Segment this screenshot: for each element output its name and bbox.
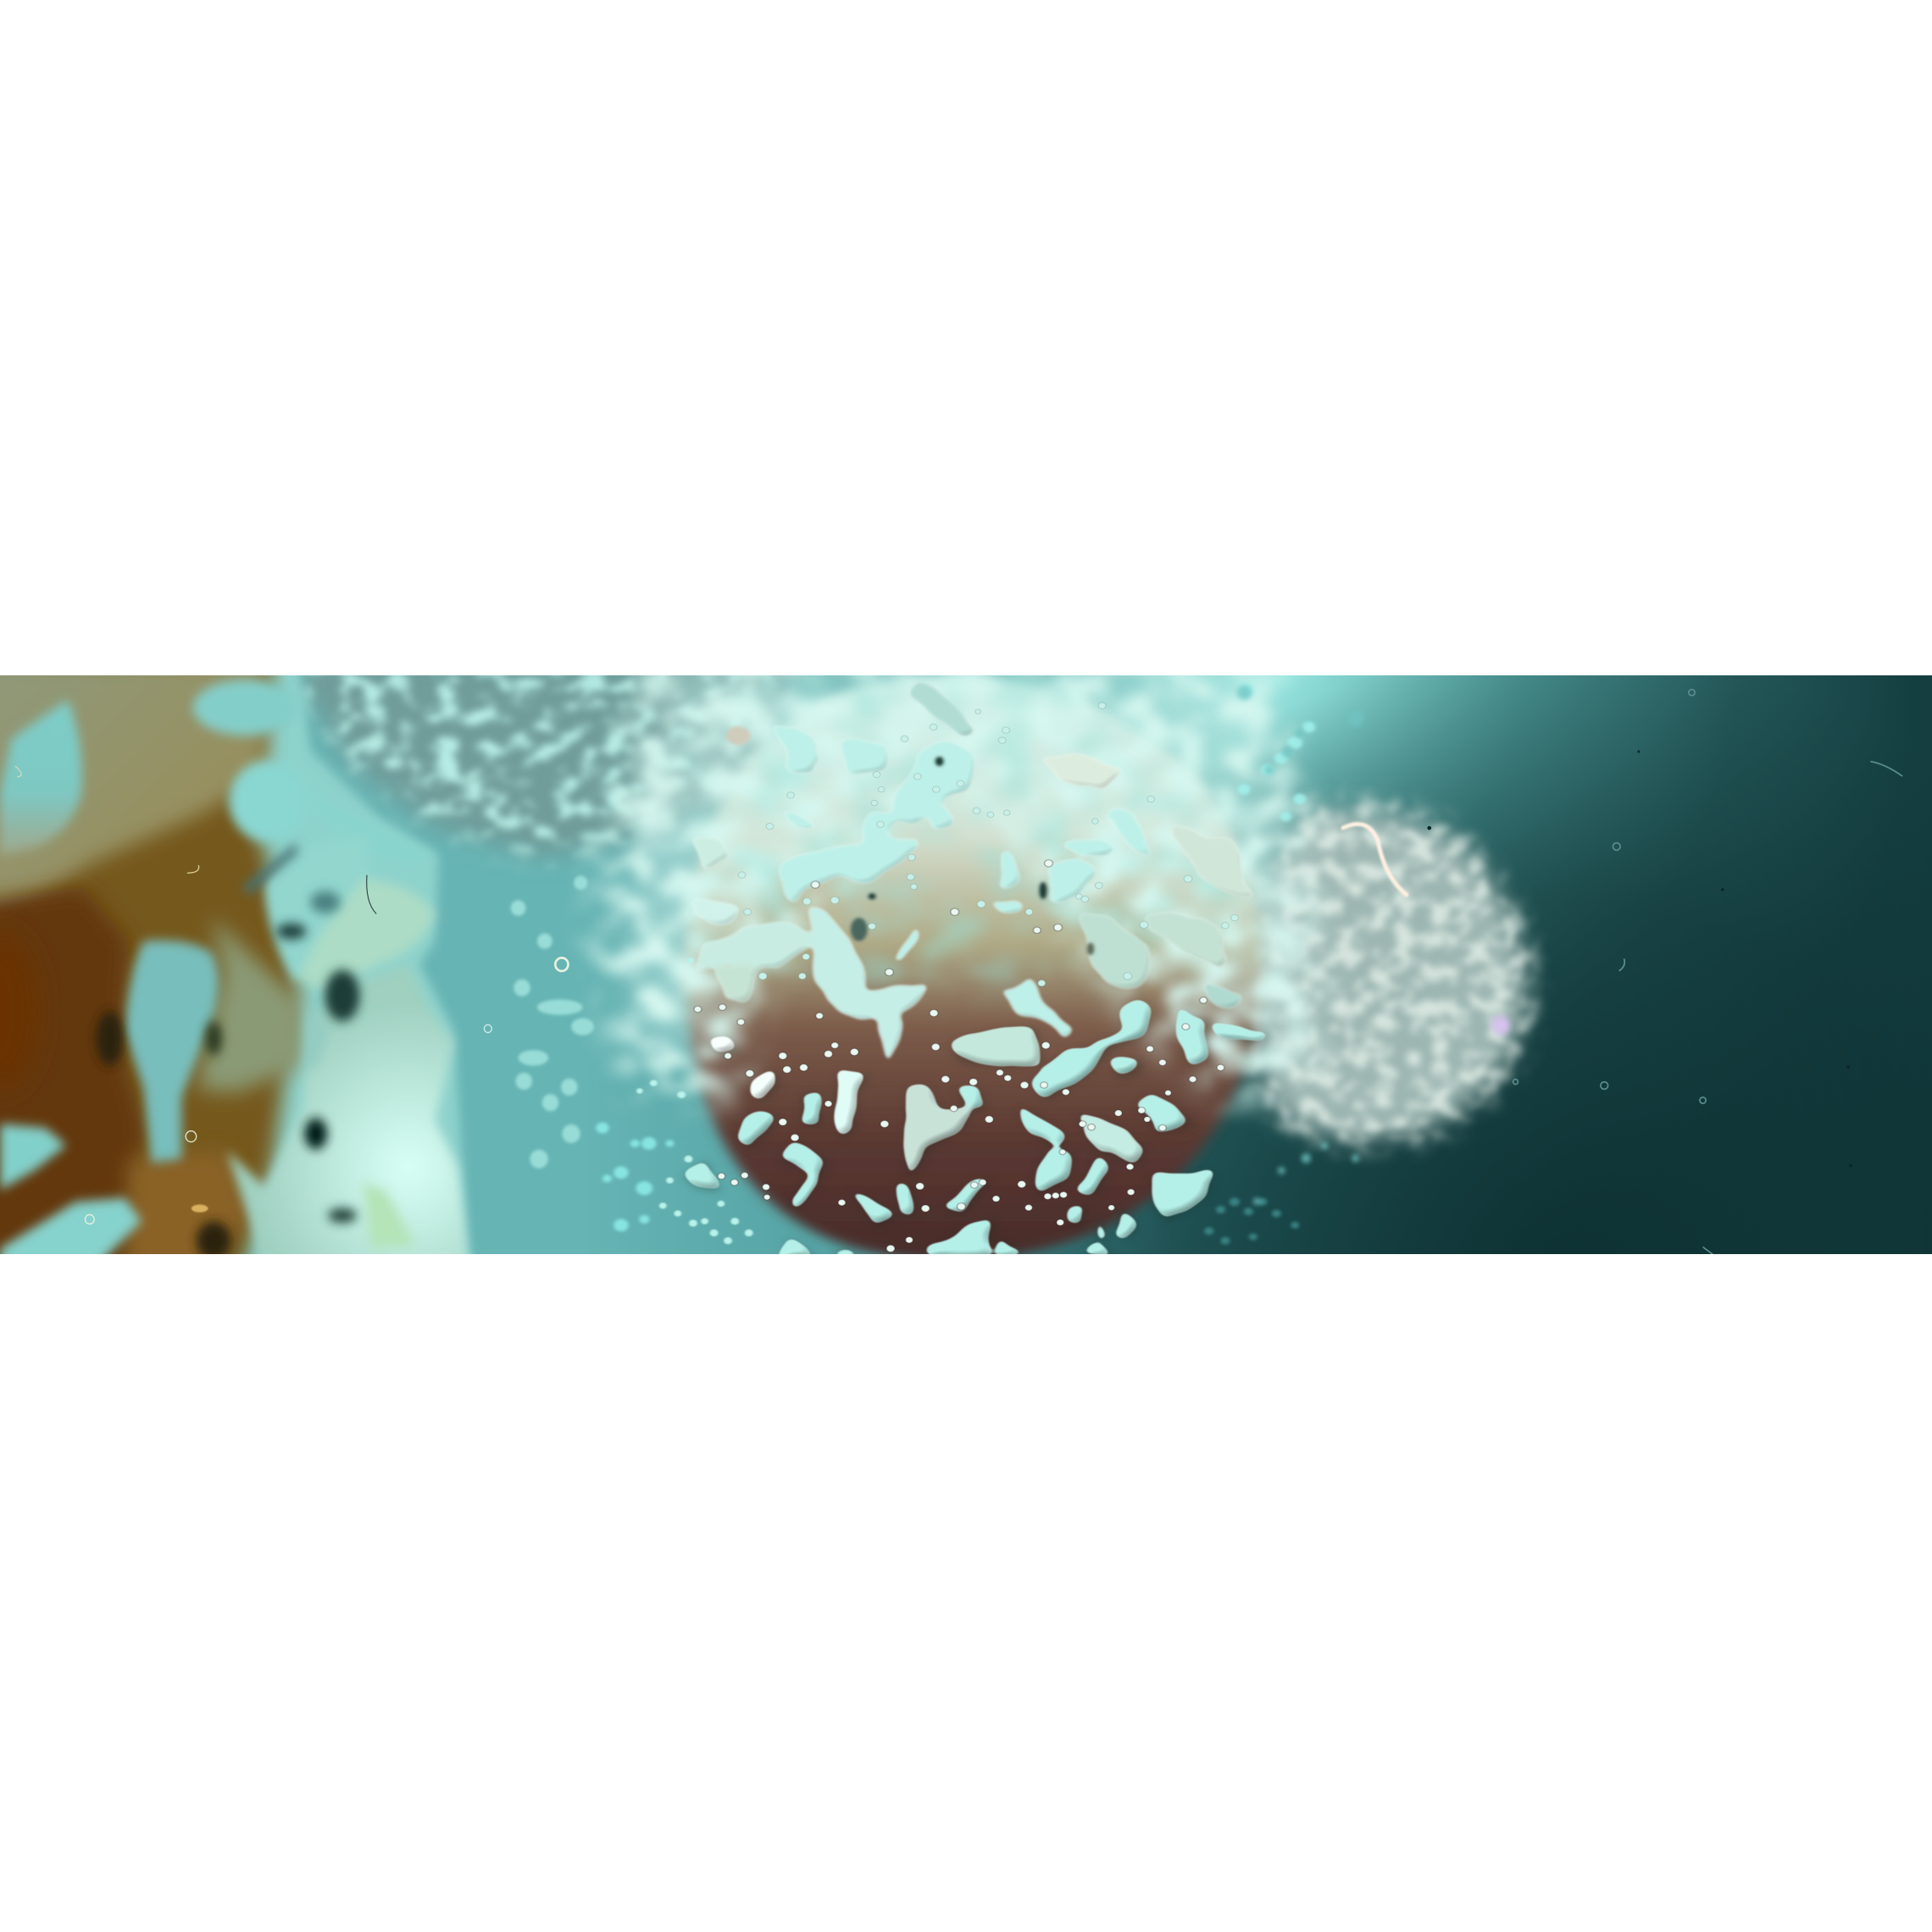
right blurred cell: [1238, 801, 1534, 1146]
back blurred cell, top: [288, 661, 788, 858]
central cell, zoomed coordinates: [686, 676, 1263, 1260]
purple speck: [1491, 1016, 1510, 1035]
drifting bubbles and specks on right: [1237, 685, 1902, 1254]
soft bokeh dots, lower left: [596, 1123, 674, 1231]
tan top: [0, 661, 264, 933]
central cell surface, zoomed coordinates: [596, 680, 1315, 1257]
gold fleck: [192, 1205, 208, 1213]
bubble dots at lower left: [636, 958, 753, 1244]
dark shaded pits: [96, 844, 360, 1260]
upper surface ridges: [686, 680, 1253, 1075]
image band: [0, 661, 1932, 1268]
white squiggle filament: [1343, 824, 1407, 895]
white dots on central cell: [694, 860, 1224, 1252]
orange lower: [129, 1152, 250, 1268]
speckled haze on upper cell: [593, 661, 1322, 1110]
background water gradient: [229, 675, 1932, 1254]
teal lobes: [0, 680, 469, 1268]
olive mid: [197, 918, 307, 1093]
pale teal dots on upper surface: [738, 702, 1238, 986]
bokeh beside left cell: [511, 875, 594, 1169]
small pink-white speck: [726, 726, 750, 745]
dark orange left: [0, 886, 144, 1268]
left foreground cell, zoomed coordinates: [0, 661, 594, 1268]
soft bokeh dots, right: [1204, 1197, 1299, 1245]
teal silhouette: [212, 661, 469, 1268]
dark pits: [851, 757, 1094, 955]
specks and rings on left cell: [15, 766, 568, 1224]
central cell body: [686, 676, 1263, 1260]
cell base: [0, 661, 299, 1268]
teal mottling on upper cell: [695, 669, 1263, 1000]
infographic: microscopic cell image band: [0, 675, 1932, 1254]
lower surface blobs: [681, 1000, 1267, 1257]
bright bokeh, top right: [1237, 684, 1315, 821]
pale wash over upper cell: [627, 669, 1296, 1051]
